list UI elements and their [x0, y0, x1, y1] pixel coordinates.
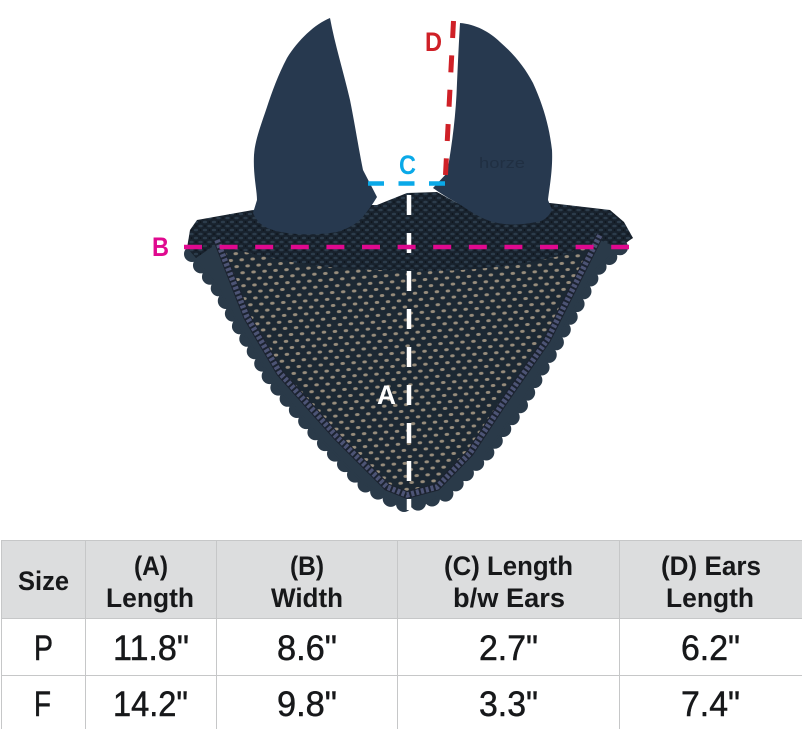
right ear [433, 23, 552, 224]
row F: 7.4" [681, 685, 740, 724]
header row [18, 551, 761, 613]
measurement D: ears length [425, 21, 454, 175]
size table [2, 540, 802, 729]
row P: 11.8" [113, 629, 189, 668]
header row: (B) [290, 551, 324, 581]
measurement C: length between ears: C [399, 150, 416, 180]
header row: Width [271, 583, 343, 613]
measurement C: length between ears [368, 150, 445, 184]
row P: 8.6" [277, 629, 337, 668]
header row: b/w Ears [453, 583, 565, 613]
row P: 2.7" [479, 629, 538, 668]
row P: P [34, 629, 53, 668]
row F: 3.3" [479, 685, 538, 724]
measurement D: ears length: D [425, 27, 442, 57]
row F: 9.8" [277, 685, 337, 724]
measurement A: length: A [377, 380, 396, 410]
twisted cord trim [217, 235, 600, 495]
header row: (D) Ears [661, 551, 761, 581]
ear logo: horze [479, 155, 525, 172]
mesh panel [217, 225, 600, 495]
header row: Length [666, 583, 754, 613]
table header background [2, 541, 802, 618]
row F [34, 685, 740, 724]
ear net product illustration [187, 18, 633, 505]
left ear [253, 18, 377, 234]
header row: (C) Length [444, 551, 573, 581]
row P [34, 629, 740, 668]
row P: 6.2" [681, 629, 740, 668]
row F: F [34, 685, 51, 724]
row F: 14.2" [113, 685, 188, 724]
header row: Size [18, 566, 69, 596]
header row: (A) [134, 551, 168, 581]
measurement B: width: B [152, 232, 169, 262]
table grid [2, 540, 802, 729]
scalloped edge [192, 215, 628, 505]
header row: Length [106, 583, 194, 613]
crochet top band [187, 192, 633, 271]
